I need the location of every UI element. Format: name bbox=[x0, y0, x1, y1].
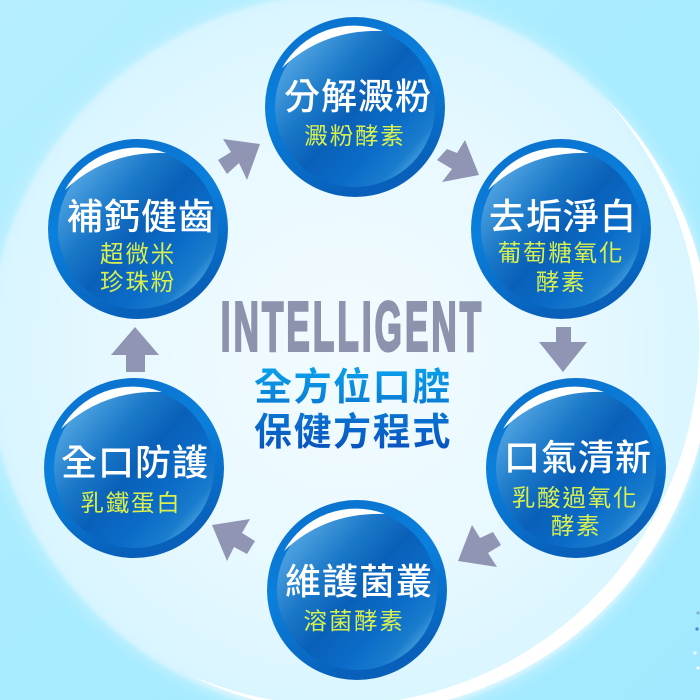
bubble: 補鈣健齒: 珍珠粉 bbox=[100, 269, 176, 295]
arrow: lower left to upper left bbox=[111, 327, 159, 372]
bubble: 維護菌叢 bbox=[267, 500, 447, 680]
bubble: 補鈣健齒 bbox=[48, 139, 228, 319]
bubble: 維護菌叢: 維護菌叢 bbox=[285, 561, 433, 602]
heading: 全方位口腔保健方程式: 保健方程式 bbox=[254, 412, 452, 454]
bubble: 分解澱粉: 澱粉酵素 bbox=[304, 123, 406, 149]
bubble: 分解澱粉 bbox=[265, 17, 445, 197]
bubble: 去垢淨白: 酵素 bbox=[536, 269, 586, 295]
heading: 全方位口腔保健方程式 bbox=[254, 367, 452, 454]
arrow: upper right to lower right bbox=[539, 327, 587, 372]
white crescent bbox=[190, 97, 700, 700]
bubble: 全口防護 bbox=[44, 378, 224, 558]
bubble: 全口防護: 乳鐵蛋白 bbox=[80, 490, 182, 516]
bubble: 去垢淨白: 去垢淨白 bbox=[489, 196, 637, 237]
arrow: bottom to lower left bbox=[212, 519, 255, 561]
arrow: lower right to bottom bbox=[458, 525, 501, 567]
heading: INTELLIGENT: INTELLIGENT bbox=[221, 287, 484, 366]
bubble: 補鈣健齒: 超微米 bbox=[100, 241, 176, 267]
bubble: 全口防護: 全口防護 bbox=[61, 442, 209, 483]
bubble: 去垢淨白 bbox=[471, 139, 651, 319]
arrow: top to upper right bbox=[437, 140, 479, 182]
decorative dots bbox=[693, 611, 700, 670]
bubble: 維護菌叢: 溶菌酵素 bbox=[303, 608, 405, 634]
arrow: upper left to top bbox=[218, 139, 260, 180]
bubble: 分解澱粉: 分解澱粉 bbox=[284, 76, 432, 117]
bubble: 口氣清新 bbox=[486, 378, 666, 558]
heading: 全方位口腔保健方程式: 全方位口腔 bbox=[254, 367, 452, 409]
bubble: 口氣清新: 口氣清新 bbox=[504, 437, 652, 478]
bubble: 補鈣健齒: 補鈣健齒 bbox=[67, 196, 215, 237]
bubble: 去垢淨白: 葡萄糖氧化 bbox=[498, 240, 624, 266]
bubble: 口氣清新: 酵素 bbox=[551, 513, 601, 539]
bubble: 口氣清新: 乳酸過氧化 bbox=[512, 485, 638, 511]
